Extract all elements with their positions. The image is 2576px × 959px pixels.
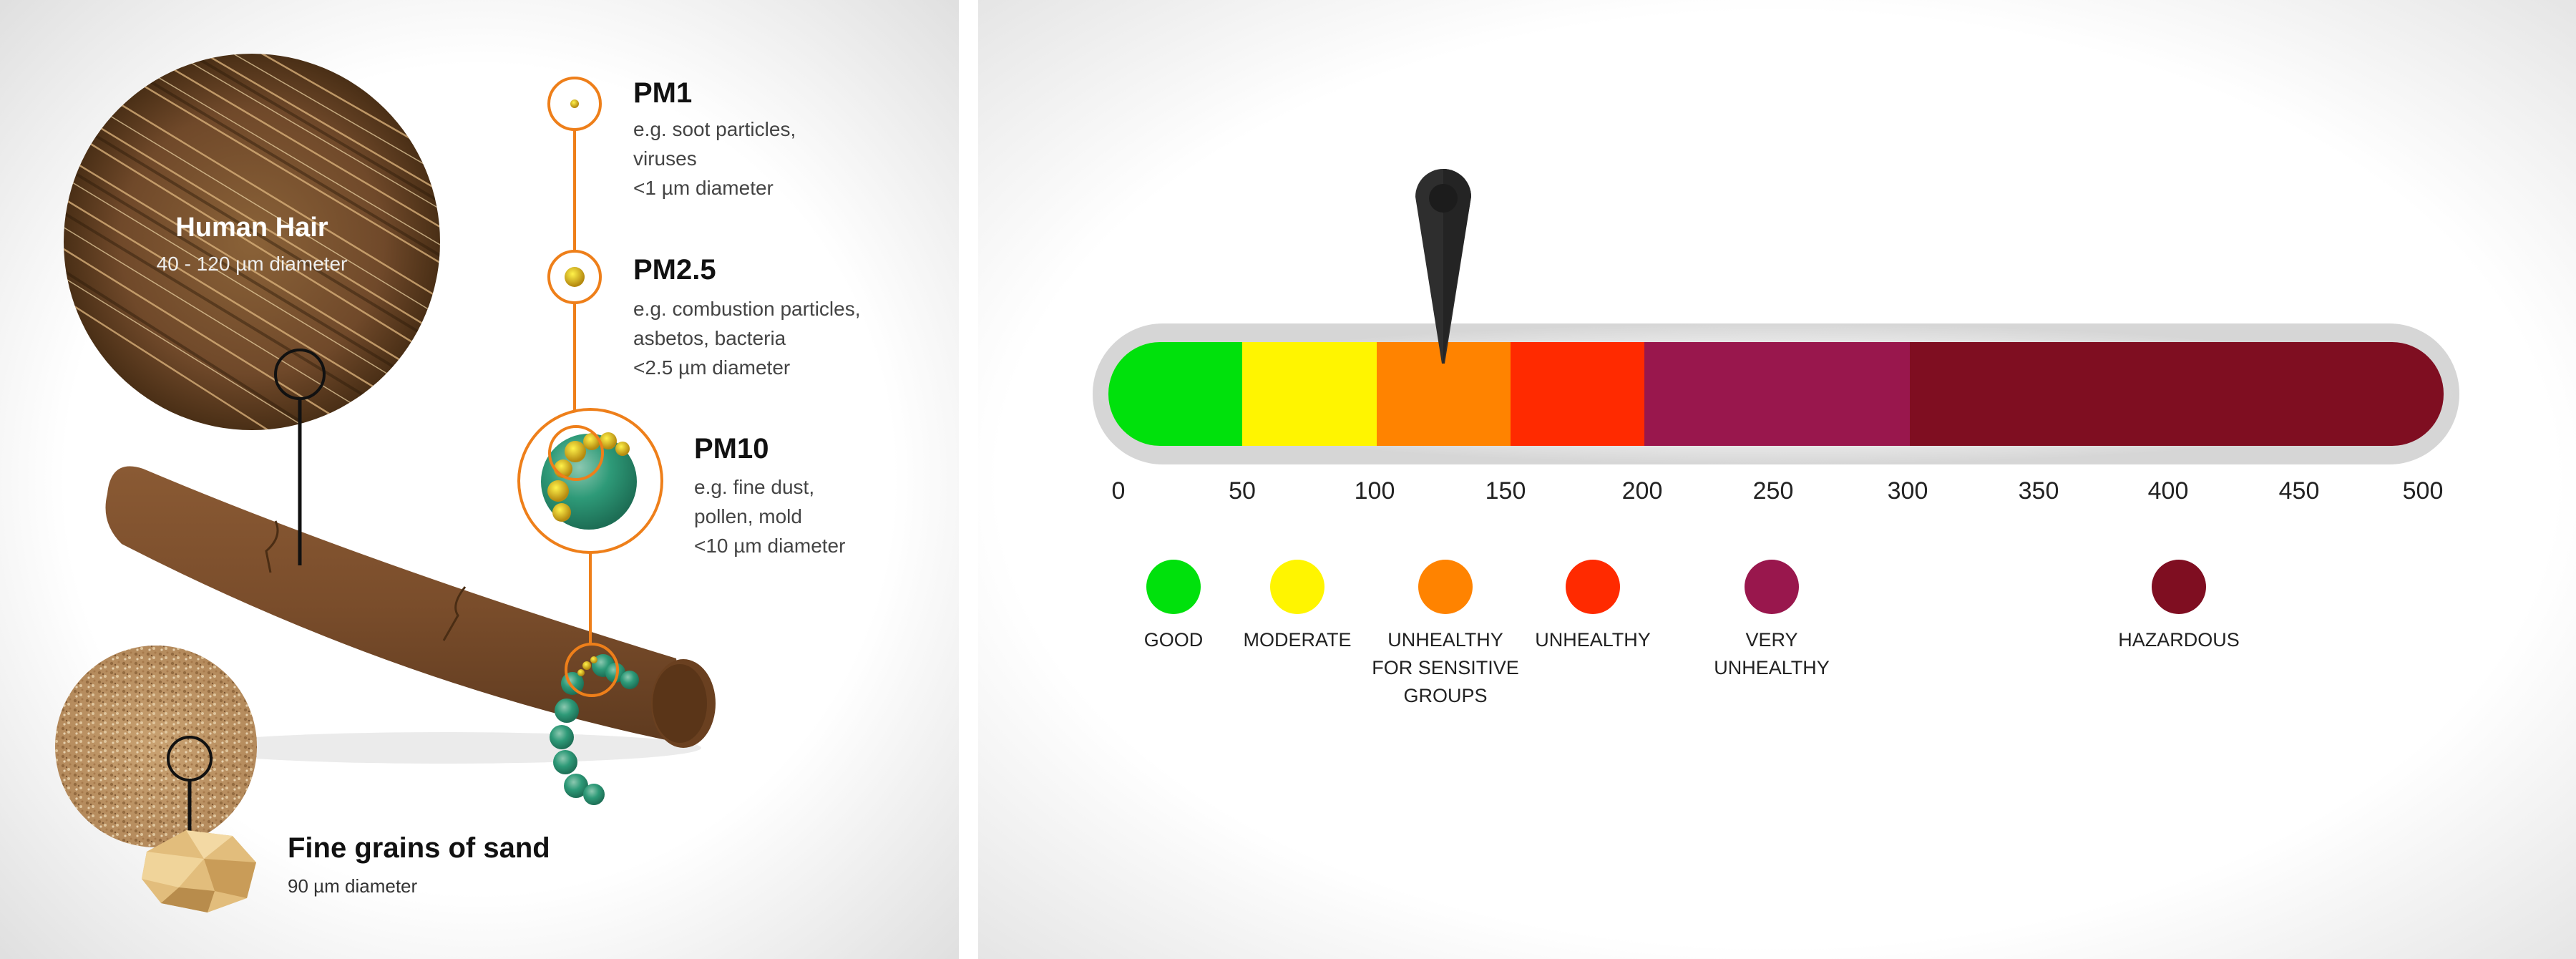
text: PM10: pollen, mold <box>694 505 802 527</box>
icon: PM1 <box>549 78 600 130</box>
legend: good <box>1144 560 1203 651</box>
heading: Human Hair: Human Hair <box>175 213 328 243</box>
text: scale numbers: 500 <box>2403 477 2443 505</box>
text: scale numbers: 200 <box>1622 477 1662 505</box>
text: scale numbers: 50 <box>1229 477 1256 505</box>
legend: good: GOOD <box>1144 629 1203 651</box>
chart: AQI colour bar <box>1093 323 2459 464</box>
icon: human hair strand <box>106 467 716 764</box>
heading: Fine grains of sand: Fine grains of sand <box>288 832 550 864</box>
panel: AQI scale <box>978 0 2576 959</box>
text: hair diameter: 40 - 120 µm diameter <box>157 253 347 275</box>
icon: human hair circle <box>43 43 444 565</box>
text: PM2.5: <2.5 µm diameter <box>633 356 790 379</box>
legend: very unhealthy: VERY <box>1745 629 1798 651</box>
panel: particle size comparison <box>0 0 959 959</box>
text: PM10: <10 µm diameter <box>694 535 845 557</box>
text: scale numbers: 250 <box>1753 477 1793 505</box>
text: PM1: PM1 <box>633 77 692 109</box>
text: scale numbers: 400 <box>2148 477 2188 505</box>
text: PM10: PM10 <box>694 433 769 464</box>
icon: PM10 <box>519 409 662 552</box>
text: PM1: <1 µm diameter <box>633 177 774 199</box>
text: scale numbers: 100 <box>1355 477 1395 505</box>
text: PM1 <box>633 77 796 199</box>
text: PM10: e.g. fine dust, <box>694 476 814 498</box>
legend: very unhealthy: UNHEALTHY <box>1714 657 1830 678</box>
legend: hazardous <box>2118 560 2240 651</box>
icon: PM2.5 <box>549 251 600 303</box>
legend: unhealthy for sensitive groups <box>1372 560 1519 706</box>
legend: unhealthy for sensitive groups: UNHEALTHY <box>1387 629 1503 651</box>
icon: hair magnifier callout <box>275 350 324 565</box>
legend: AQI categories <box>1144 560 2240 706</box>
legend: unhealthy for sensitive groups: GROUPS <box>1403 685 1488 706</box>
icon: PM10 on hair marker <box>566 644 618 696</box>
icon: sand circle <box>55 646 257 847</box>
icon: sand grain <box>142 830 256 912</box>
text: scale numbers: 450 <box>2279 477 2319 505</box>
text: scale numbers: 150 <box>1485 477 1526 505</box>
text: PM1: viruses <box>633 147 697 170</box>
text: scale numbers: 300 <box>1888 477 1928 505</box>
legend: unhealthy <box>1535 560 1651 651</box>
legend: moderate <box>1243 560 1352 651</box>
text: PM10 <box>694 433 845 557</box>
connector line: PM scale <box>575 130 590 644</box>
text: PM1: e.g. soot particles, <box>633 118 796 140</box>
legend: moderate: MODERATE <box>1243 629 1352 651</box>
legend: very unhealthy <box>1714 560 1830 678</box>
text: scale numbers: 0 <box>1112 477 1125 505</box>
text: sand diameter: 90 µm diameter <box>288 875 418 897</box>
legend: unhealthy for sensitive groups: FOR SENSITIVE <box>1372 657 1519 678</box>
text: PM2.5: asbetos, bacteria <box>633 327 786 349</box>
text: scale numbers: 350 <box>2019 477 2059 505</box>
text: scale numbers <box>1112 477 2443 505</box>
text: PM2.5: e.g. combustion particles, <box>633 298 860 320</box>
text: PM2.5: PM2.5 <box>633 254 716 286</box>
icon: particles on hair <box>550 654 639 805</box>
icon: pointer needle <box>1415 169 1471 364</box>
legend: hazardous: HAZARDOUS <box>2118 629 2240 651</box>
legend: unhealthy: UNHEALTHY <box>1535 629 1651 651</box>
text: PM2.5 <box>633 254 860 379</box>
